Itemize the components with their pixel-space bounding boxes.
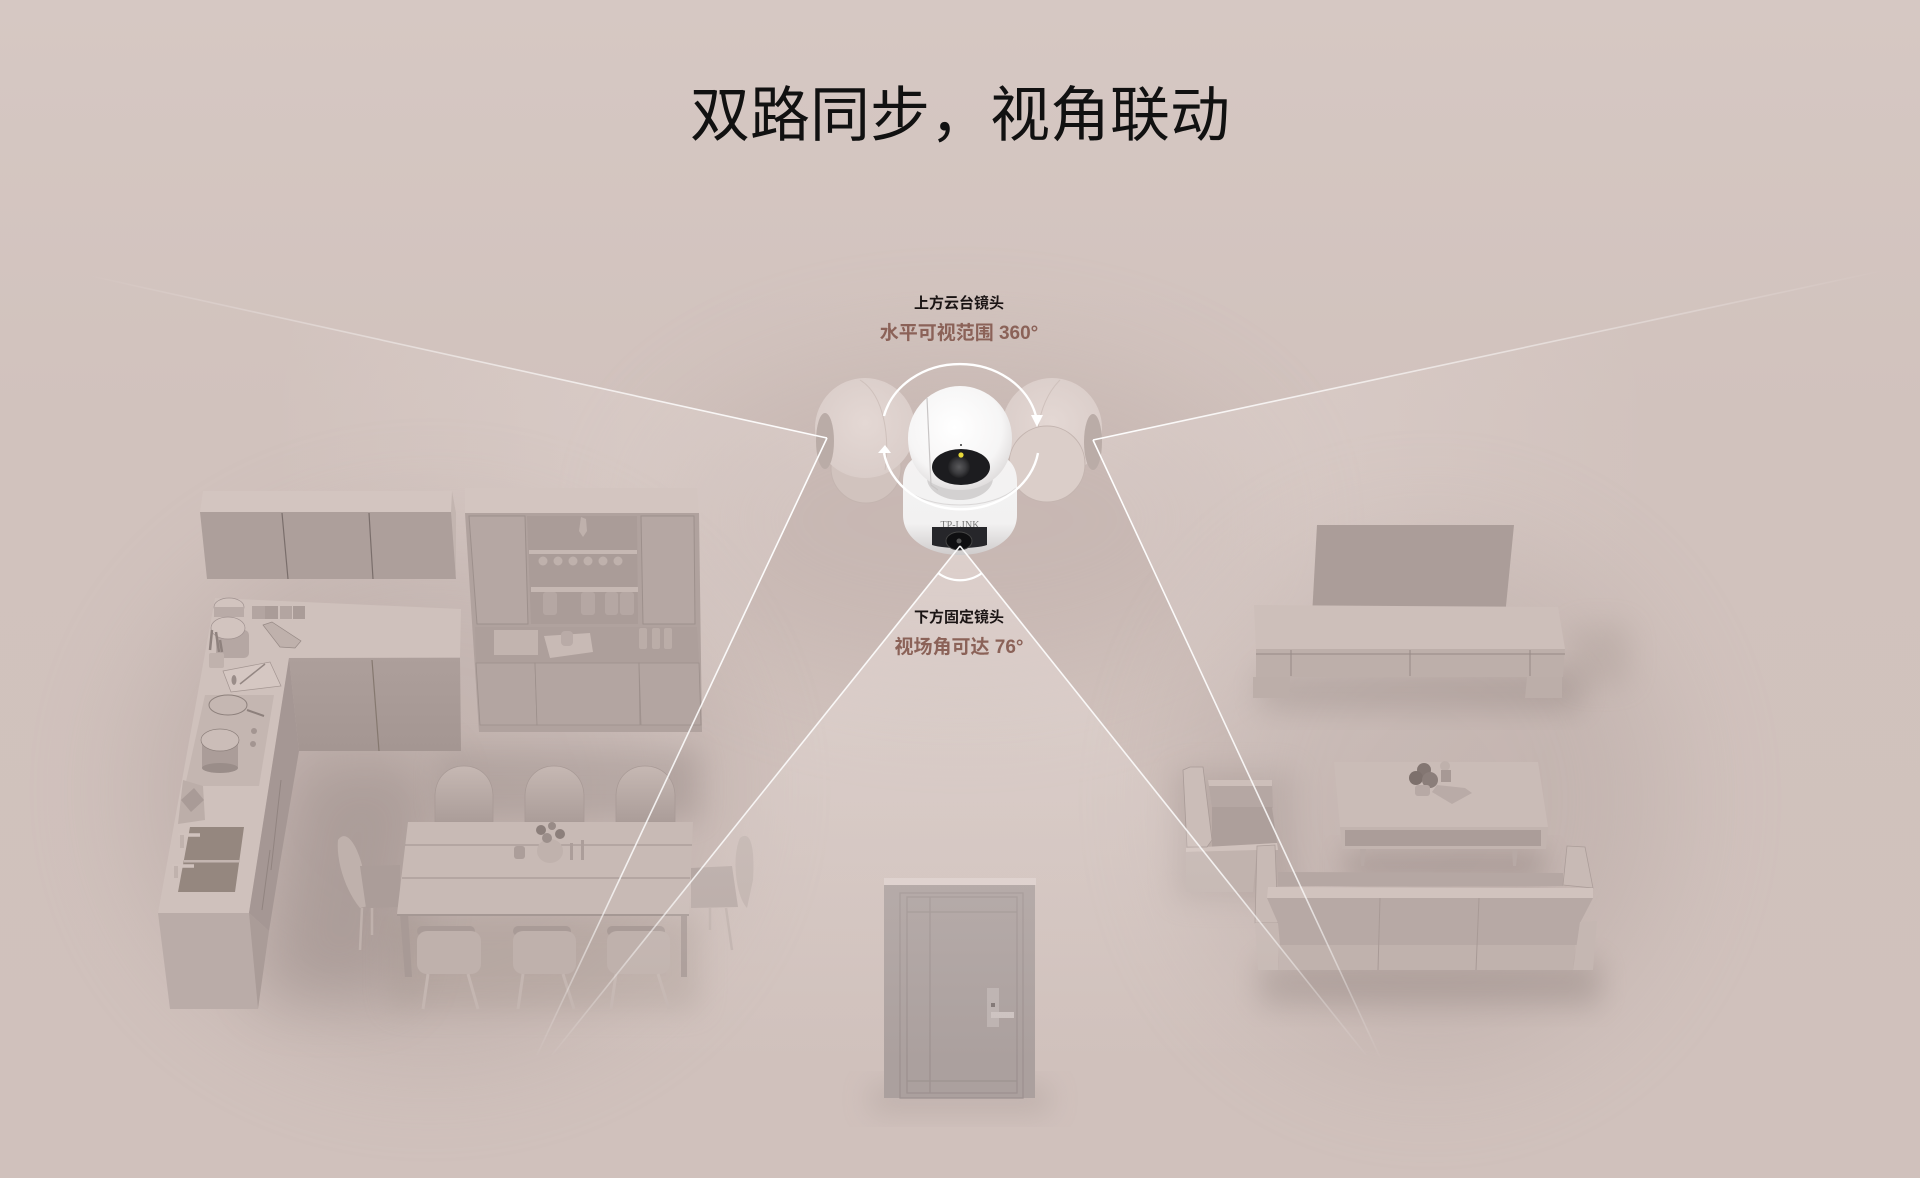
back chairs: [435, 766, 675, 822]
panel: kitchen: [158, 491, 461, 1009]
camera dome: [908, 386, 1012, 500]
sofa: [1255, 845, 1597, 970]
table legs: [400, 914, 687, 977]
label: pan lens spec: 水平可视范围 360°: [880, 322, 1038, 344]
hob with pots: [185, 695, 274, 786]
view wedge: right pan lens: [1093, 270, 1886, 1070]
cabinet body: [465, 513, 702, 732]
lower arc: [884, 453, 1038, 509]
table centerpiece: [514, 822, 584, 863]
armchair: [1183, 767, 1278, 892]
label: fixed lens name: 下方固定镜头: [914, 608, 1004, 626]
open shelves: [527, 516, 638, 624]
door lock: [987, 988, 1014, 1027]
table top: [397, 822, 693, 916]
right door: [641, 516, 695, 624]
light cone: fixed lens: [552, 546, 1366, 1055]
panel: tall cabinet: [465, 488, 702, 732]
TP-LINK logo: TP-LINK: [941, 520, 980, 531]
rotation arrows: [878, 364, 1043, 580]
cabinet top: [465, 488, 699, 513]
right chair: [691, 836, 753, 950]
panel: living room: [1183, 525, 1597, 970]
fixed lens arc: [938, 573, 982, 580]
left door: [469, 516, 528, 624]
sink with faucets: [172, 827, 244, 892]
label: fixed lens spec: 视场角可达 76°: [894, 635, 1024, 658]
left chair: [338, 836, 400, 950]
counter objects: [178, 598, 305, 824]
front chairs: [417, 926, 670, 1009]
lower doors: [476, 663, 701, 725]
base counter: [158, 598, 461, 1009]
table plant and books: [1409, 761, 1472, 804]
camera base: [903, 450, 1017, 555]
view wedge: left pan lens: [86, 275, 827, 1055]
TV: [1312, 525, 1514, 627]
camera fixed lens: [932, 527, 987, 550]
title: 双路同步，视角联动: [690, 82, 1230, 149]
upper arrowhead: [1031, 415, 1043, 427]
coffee table: [1334, 762, 1548, 866]
panel: entry door: [884, 878, 1036, 1098]
door lintel: [884, 878, 1036, 885]
field of view lines: [86, 270, 1886, 1068]
upper wall cabinets: [200, 491, 456, 579]
panel: dining set: [338, 766, 753, 1009]
ghost camera left: [815, 378, 915, 503]
TV console: [1253, 605, 1565, 698]
door leaf: [900, 893, 1023, 1098]
label: pan lens name: 上方云台镜头: [914, 294, 1004, 312]
lower niche: [475, 627, 699, 663]
camera: [903, 386, 1017, 555]
door frame: [884, 885, 1035, 1098]
upper arc: [884, 364, 1036, 416]
ghost camera right: [1002, 378, 1102, 502]
camera pan lens: [932, 444, 990, 485]
lower arrowhead: [878, 445, 891, 453]
